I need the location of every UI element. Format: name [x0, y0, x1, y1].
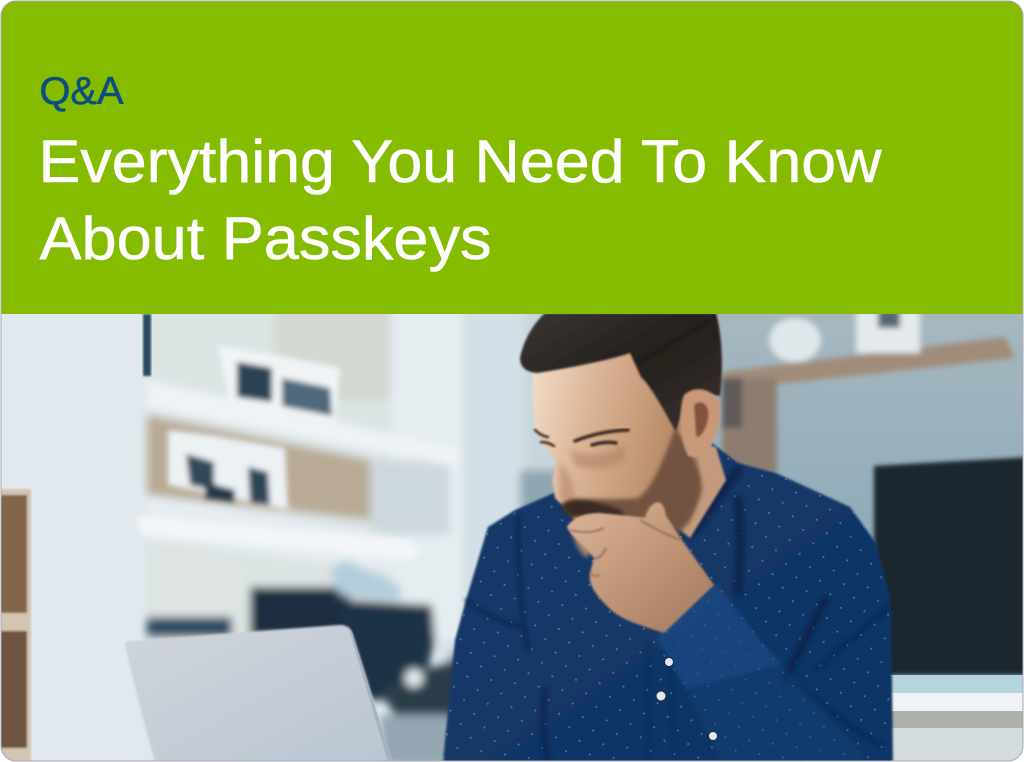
- hair: [520, 313, 722, 432]
- blurred room background: [0, 300, 1024, 762]
- framed photos on shelves: [168, 345, 340, 510]
- dark monitor: [874, 457, 1024, 675]
- white illuminated shelf edge: [137, 515, 420, 560]
- right shelf with ornaments: [722, 310, 1015, 473]
- facial shading: [560, 445, 625, 500]
- title: [38, 128, 882, 272]
- face: [532, 340, 700, 528]
- left white column: [0, 300, 140, 762]
- desk: [890, 675, 1024, 762]
- cuff: [656, 583, 783, 690]
- header panel: [0, 0, 1024, 314]
- shirt folds and shadows: [466, 470, 891, 762]
- shirt: [443, 443, 893, 762]
- back shelf unit: [150, 300, 390, 640]
- photo: man looking at a laptop: [0, 300, 1024, 762]
- right wall: [710, 314, 1022, 675]
- beard: [560, 428, 702, 558]
- laptop: [125, 625, 392, 762]
- title: About Passkeys: [40, 205, 492, 272]
- hand: [567, 502, 714, 633]
- title: Everything You Need To Know: [38, 128, 882, 195]
- finger creases: [570, 520, 680, 576]
- man: [443, 313, 893, 762]
- eyebrow label: Q&A: [40, 70, 124, 113]
- neck: [677, 444, 728, 539]
- wooden cabinet: [0, 489, 31, 762]
- shirt buttons: [656, 658, 718, 740]
- eyes and brows: [535, 430, 628, 446]
- ear: [681, 389, 720, 458]
